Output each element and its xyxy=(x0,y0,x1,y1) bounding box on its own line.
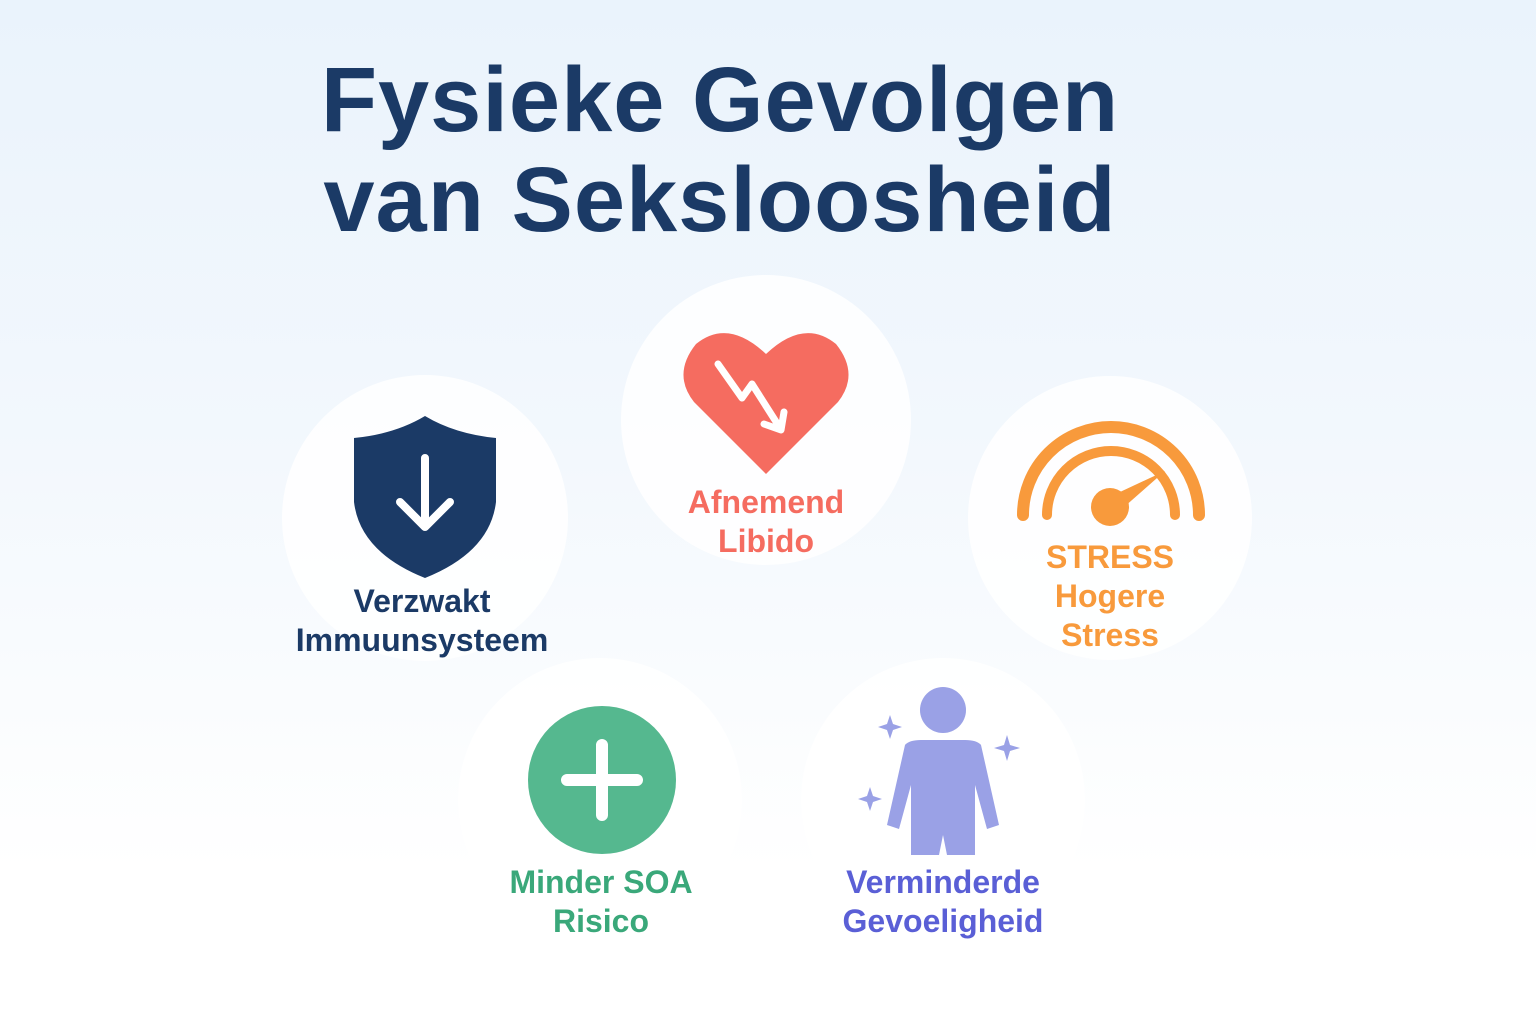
icon: plus xyxy=(528,706,676,854)
title: Fysieke Gevolgen xyxy=(321,49,1119,151)
title: van Seksloosheid xyxy=(323,149,1117,251)
icon: heart xyxy=(684,333,848,474)
label: immune: Verzwakt xyxy=(354,583,490,619)
icon: person xyxy=(858,687,1020,855)
panel: libido xyxy=(621,275,911,565)
label: sensitivity: Verminderde xyxy=(846,864,1040,900)
panel: soa circle xyxy=(458,658,742,942)
label: stress: STRESS xyxy=(1046,539,1174,575)
icon: shield xyxy=(354,416,496,578)
label: stress xyxy=(1046,539,1174,653)
panel: immune xyxy=(282,375,568,562)
label: stress: Hogere xyxy=(1055,578,1165,614)
panel: stress circle xyxy=(968,376,1252,660)
label: soa: Risico xyxy=(553,903,649,939)
label: libido: Libido xyxy=(718,523,814,559)
icon: gauge xyxy=(1017,421,1205,526)
panel: sensitivity circle xyxy=(801,658,1085,942)
label: libido xyxy=(688,484,844,559)
label: immune: Immuunsysteem xyxy=(296,622,548,658)
label: immune xyxy=(296,583,548,658)
label: libido: Afnemend xyxy=(688,484,844,520)
label: sensitivity xyxy=(843,864,1043,939)
label: soa: Minder SOA xyxy=(509,864,693,900)
label: sensitivity: Gevoeligheid xyxy=(843,903,1043,939)
circle xyxy=(282,375,568,661)
label: stress: Stress xyxy=(1061,617,1159,653)
label: soa xyxy=(509,864,693,939)
title xyxy=(321,49,1119,251)
